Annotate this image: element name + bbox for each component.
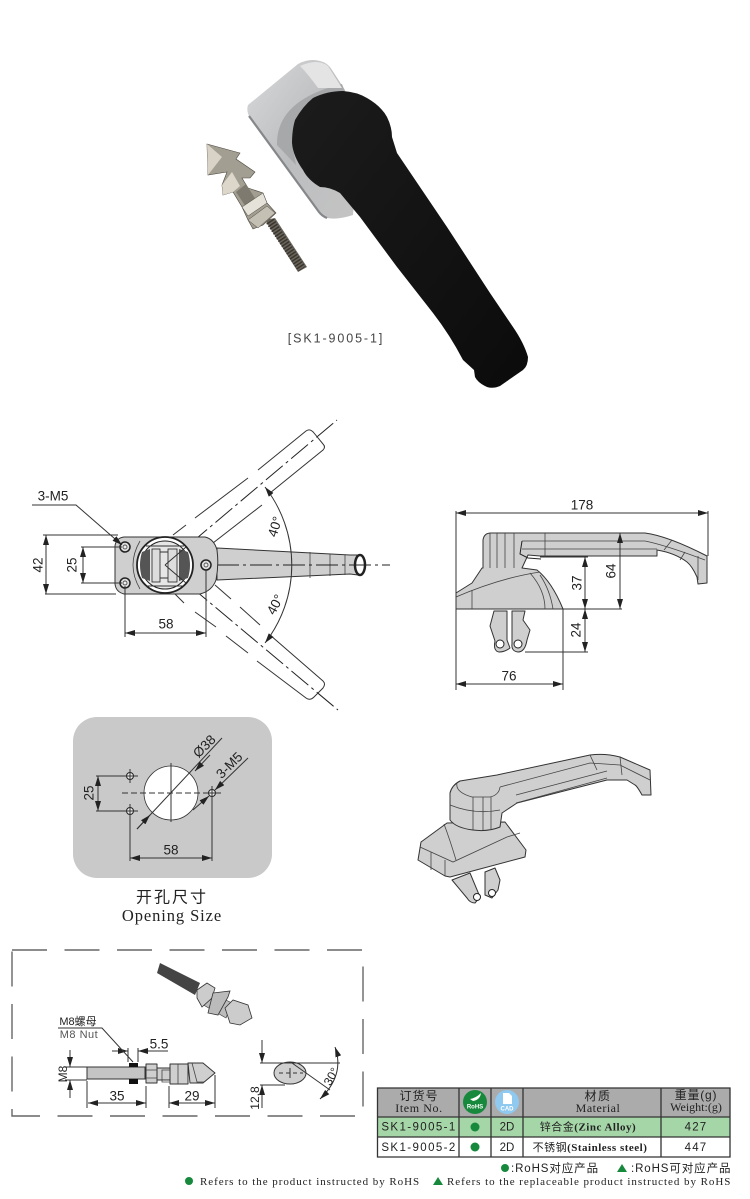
photo: latch screw	[207, 144, 307, 272]
table: header item no	[395, 1088, 443, 1115]
side view: dimensions: 178	[571, 498, 593, 513]
isometric: base	[418, 822, 526, 877]
table: header band	[378, 1088, 730, 1117]
photo: black handle	[292, 91, 528, 388]
side view: mounting ears	[490, 611, 530, 652]
legend: english: Refers to the product instructed by RoHS	[200, 1176, 420, 1188]
icon: RoHS: RoHS	[467, 1105, 483, 1111]
latch screw: side view dimensions: M8螺母	[59, 1015, 97, 1028]
latch screw: side view dimensions: M8 Nut	[60, 1029, 98, 1041]
side view: dimensions: 64	[604, 563, 619, 579]
side view: dimensions: 37	[570, 575, 585, 591]
latch screw: end view with angle: 12.8	[248, 1086, 262, 1110]
opening size: dimensions: 25	[82, 785, 97, 801]
isometric: handle	[450, 754, 651, 831]
legend: chinese	[501, 1161, 731, 1175]
photo: silver base plate	[247, 60, 358, 219]
table: row 2	[381, 1141, 707, 1154]
opening size: dimensions: 3-M5	[213, 749, 246, 782]
table: row 1: 锌合金(Zinc Alloy)	[540, 1119, 636, 1133]
panel: opening size	[73, 717, 272, 878]
isometric: ears	[452, 868, 500, 903]
icon: CAD: CAD	[500, 1107, 514, 1113]
table: row 1	[381, 1119, 707, 1134]
panel: latch screw dashed frame	[12, 950, 363, 1116]
table: header weight	[670, 1088, 722, 1114]
opening size: holes and centre lines	[122, 763, 221, 822]
table: header material	[576, 1089, 620, 1115]
side view drawing with dimensions	[456, 498, 708, 690]
table: row 1: SK1-9005-1	[381, 1122, 457, 1134]
top view: base plate	[115, 537, 218, 594]
table: header material: Material	[576, 1101, 620, 1115]
latch screw: end view with angle: 30°	[321, 1065, 342, 1088]
top view: dimensions: 40°	[264, 592, 287, 617]
latch screw: side view dimensions: M8	[56, 1065, 70, 1082]
isometric: contour lines	[420, 755, 650, 876]
table: row 1: 2D	[500, 1122, 514, 1134]
table: header material: 材质	[584, 1089, 612, 1103]
table: header weight: 重量(g)	[675, 1088, 717, 1102]
latch screw: perspective view	[157, 963, 252, 1025]
table: header weight: Weight:(g)	[670, 1100, 722, 1114]
latch screw: end view with angle	[248, 1040, 342, 1110]
product photo: handle and latch screw	[207, 60, 528, 388]
side view: dimensions: 24	[569, 622, 584, 638]
side view: handle and base	[456, 533, 707, 609]
isometric view drawing	[418, 754, 651, 903]
latch screw: side view dimensions: 5.5	[150, 1037, 168, 1052]
opening size: dimensions: 58	[163, 843, 179, 858]
icon: RoHS	[463, 1090, 487, 1114]
top view: dimensions: 58	[158, 617, 174, 632]
table: highlighted row	[378, 1117, 730, 1137]
top view: dimensions	[31, 487, 292, 643]
table: row 1: 427	[685, 1122, 707, 1134]
top view: handle in neutral position	[217, 548, 390, 580]
table: row 2: 不锈钢(Stainless steel)	[533, 1141, 647, 1154]
top view: handle rotated positions	[165, 420, 338, 710]
side view: dimensions: 76	[501, 669, 517, 684]
opening size: dimensions	[82, 732, 248, 861]
top view: dimensions: 25	[65, 557, 80, 573]
top view: dimensions: 3-M5	[38, 489, 68, 504]
table: grid	[378, 1088, 730, 1157]
latch screw: side view dimensions	[56, 1015, 215, 1108]
latch screw: side view dimensions: 29	[184, 1089, 200, 1104]
latch screw: side view dimensions: 35	[109, 1089, 125, 1104]
opening size: english title: Opening Size	[122, 906, 222, 925]
legend: english	[185, 1176, 731, 1188]
side view: dimensions	[456, 498, 708, 690]
top view: dimensions: 40°	[265, 515, 285, 539]
table: row 2: 447	[685, 1142, 707, 1154]
table: row 2: 2D	[500, 1142, 514, 1154]
opening size: chinese title: 开孔尺寸	[136, 883, 208, 907]
table: row 2: SK1-9005-2	[381, 1142, 457, 1154]
icon: CAD	[495, 1090, 519, 1114]
top view: dimensions: 42	[31, 557, 46, 573]
caption: model number: [SK1-9005-1]	[288, 331, 384, 345]
top view drawing with rotation range	[31, 420, 390, 710]
table: header item no: Item No.	[395, 1101, 443, 1115]
opening size: dimensions: Ø38	[190, 732, 219, 761]
legend: chinese: :RoHS对应产品	[511, 1161, 599, 1175]
legend: chinese: :RoHS可对应产品	[631, 1161, 731, 1175]
legend: english: Refers to the replaceable product instructed by RoHS	[447, 1176, 731, 1188]
latch screw: side view	[87, 1063, 215, 1084]
specification table	[378, 1088, 730, 1157]
opening size: grey plate	[73, 717, 272, 878]
table: header item no: 订货号	[399, 1088, 439, 1103]
